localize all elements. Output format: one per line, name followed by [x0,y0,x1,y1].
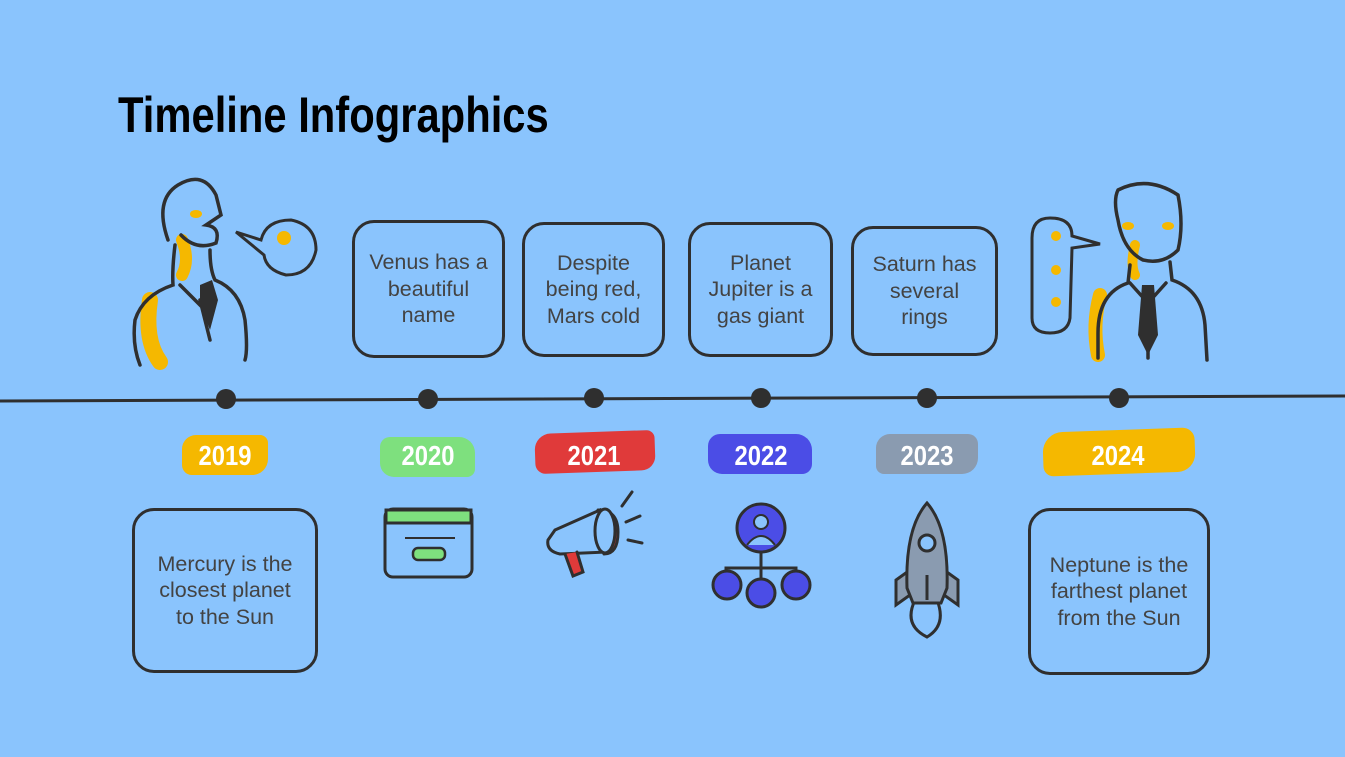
box 2021: Despite [557,251,630,275]
box 2021: being red, [546,277,641,301]
year 2024: 2024 [1092,440,1144,471]
box 2019: closest planet [159,578,291,602]
year 2021: 2021 [568,440,620,471]
year brush: 2024 [1042,427,1196,477]
title: Timeline Infographics [118,87,549,143]
box 2022: Jupiter is a [709,277,812,301]
box 2019 [132,508,318,673]
box 2020: beautiful [388,277,469,301]
box 2021: Mars cold [547,304,640,328]
box 2021 [522,222,665,357]
box 2020: Venus has a [369,250,488,274]
box 2022: gas giant [717,304,804,328]
box 2022: Planet [730,251,791,275]
box 2024: from the Sun [1057,606,1181,630]
box 2020 [352,220,505,358]
year 2023: 2023 [901,440,953,471]
box 2023 [851,226,998,356]
box 2023: rings [901,305,948,329]
box 2019: to the Sun [176,605,274,629]
box 2024: Neptune is the [1050,553,1188,577]
box 2022 [688,222,833,357]
year brush: 2019 [182,435,268,475]
year 2022: 2022 [735,440,787,471]
year brush: 2021 [534,430,656,474]
box 2020: name [402,303,455,327]
box 2023: several [890,279,959,303]
year 2020: 2020 [402,440,454,471]
year 2019: 2019 [199,440,251,471]
year brush: 2020 [380,437,475,477]
box 2023: Saturn has [872,252,976,276]
box 2024 [1028,508,1210,675]
box 2024: farthest planet [1051,579,1187,603]
box 2019: Mercury is the [157,552,292,576]
year brush: 2023 [876,434,978,474]
year brush: 2022 [708,434,812,474]
